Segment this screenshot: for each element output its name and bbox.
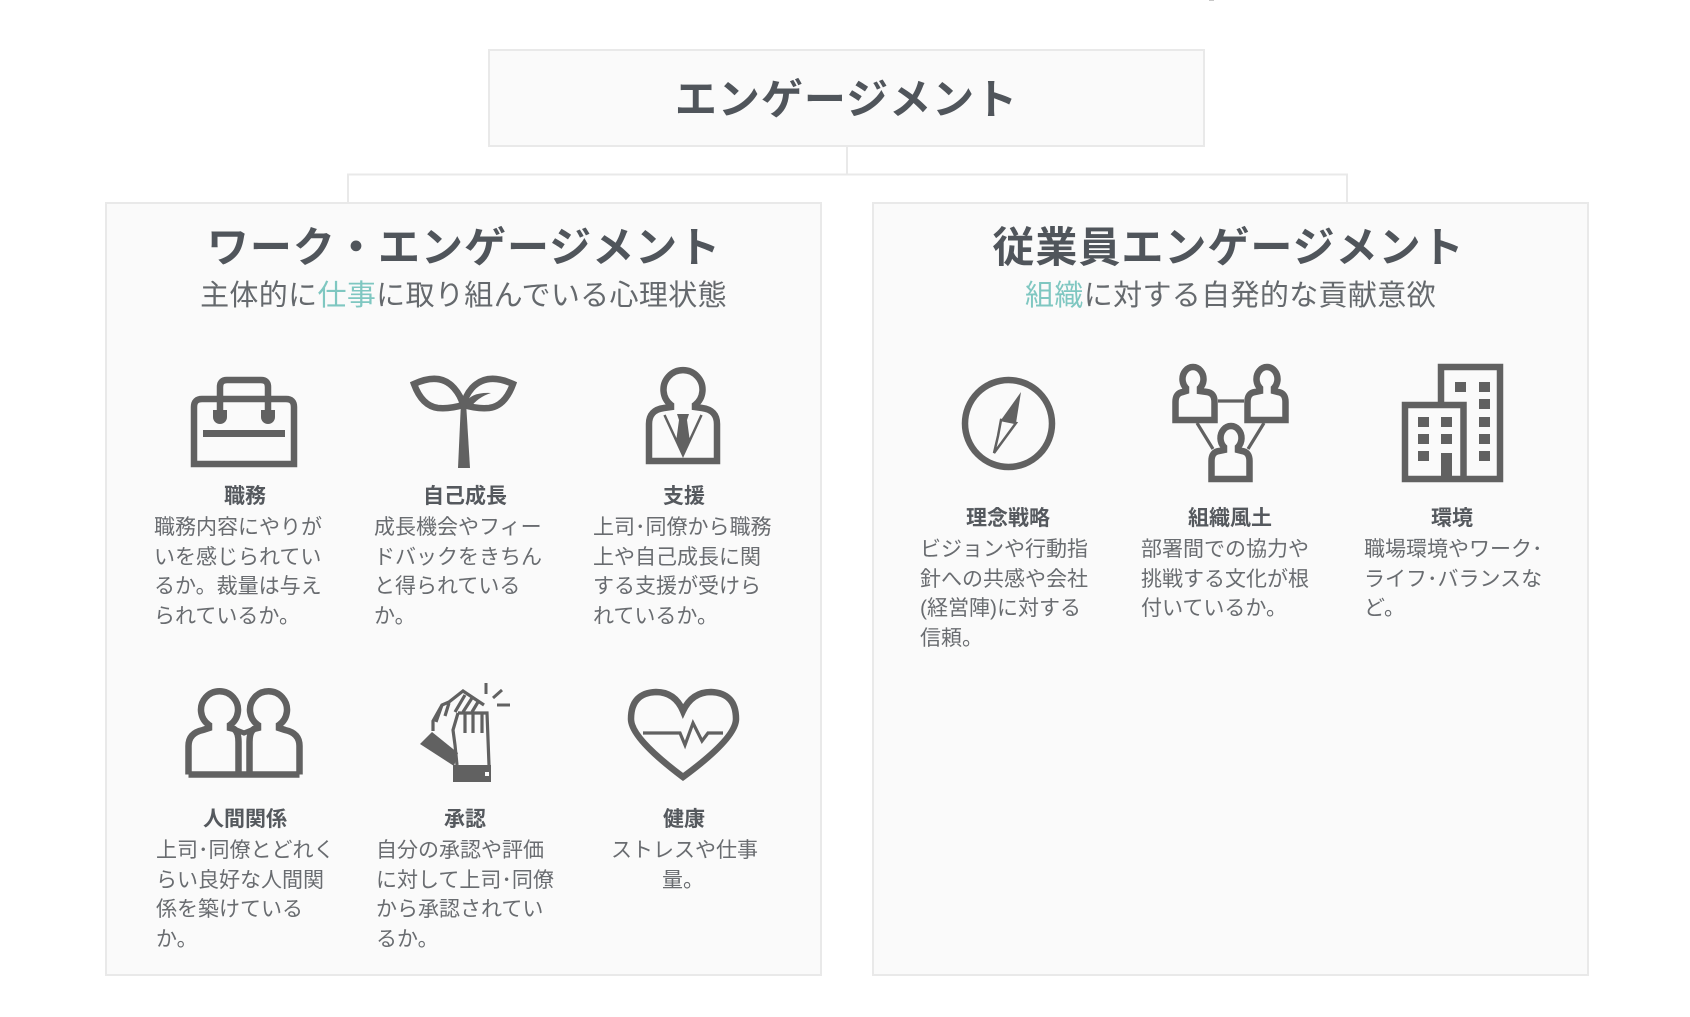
description xyxy=(1141,538,1309,620)
description: と得られている xyxy=(374,575,520,598)
description: ストレスや仕事 xyxy=(611,839,758,862)
description: 信頼。 xyxy=(920,627,983,650)
icon: sprout xyxy=(410,376,517,468)
description: ど。 xyxy=(1364,597,1405,620)
item: 職務 xyxy=(154,376,322,628)
panel: ワーク・エンゲージメント xyxy=(105,202,822,976)
icon: person with tie xyxy=(646,366,720,464)
label: 環境 xyxy=(1431,507,1473,530)
item: 理念戦略 xyxy=(920,376,1088,650)
description: 付いているか。 xyxy=(1141,597,1287,620)
label: 理念戦略 xyxy=(966,507,1050,530)
label: 健康 xyxy=(663,808,705,831)
description: ライフ･バランスな xyxy=(1364,568,1542,591)
description: か。 xyxy=(156,928,198,951)
heading: employee engagement: 従業員エンゲージメント xyxy=(992,224,1465,271)
title box: エンゲージメント xyxy=(488,49,1205,147)
description: られているか。 xyxy=(154,605,300,628)
subheading: employee engagement: 組織に対する自発的な貢献意欲 xyxy=(1025,280,1436,312)
icon: compass xyxy=(962,376,1056,470)
icon: bag xyxy=(190,376,298,468)
description: 針への共感や会社 xyxy=(920,568,1088,591)
description: から承認されてい xyxy=(376,898,543,921)
label: 承認 xyxy=(444,808,486,831)
description: 係を築けている xyxy=(156,898,303,921)
description: るか。裁量は与え xyxy=(154,575,322,598)
description: らい良好な人間関 xyxy=(156,869,324,892)
description xyxy=(374,516,542,628)
icon: connected people xyxy=(1172,364,1289,482)
description xyxy=(156,839,334,951)
label: 人間関係 xyxy=(203,808,287,831)
description: 職場環境やワーク･ xyxy=(1364,538,1542,561)
item: 支援 xyxy=(593,366,772,628)
item: 人間関係 xyxy=(156,688,334,951)
description: 挑戦する文化が根 xyxy=(1141,568,1309,591)
item: 承認 xyxy=(376,683,554,951)
description xyxy=(1364,538,1542,620)
item: 環境 xyxy=(1364,364,1542,620)
description: か。 xyxy=(374,605,416,628)
description: れているか。 xyxy=(593,605,718,628)
description: 上司･同僚から職務 xyxy=(593,516,772,539)
description: 部署間での協力や xyxy=(1141,538,1309,561)
description: 職務内容にやりが xyxy=(154,516,322,539)
item: 組織風土 xyxy=(1141,364,1309,620)
heading: work engagement: ワーク・エンゲージメント xyxy=(207,224,721,271)
panel: 従業員エンゲージメント xyxy=(872,202,1589,976)
icon: buildings xyxy=(1402,364,1504,482)
description: いを感じられてい xyxy=(154,546,321,569)
description: に対して上司･同僚 xyxy=(376,869,554,892)
item: 自己成長 xyxy=(374,376,542,628)
description: 上や自己成長に関 xyxy=(593,546,761,569)
description: 上司･同僚とどれく xyxy=(156,839,334,862)
description: 自分の承認や評価 xyxy=(376,839,544,862)
description: する支援が受けら xyxy=(593,575,761,598)
description xyxy=(611,839,758,892)
description: るか。 xyxy=(376,928,439,951)
icon: two people xyxy=(185,688,303,778)
icon: heart with pulse xyxy=(628,688,740,781)
description xyxy=(593,516,772,628)
connector lines xyxy=(347,147,1348,202)
description xyxy=(376,839,554,951)
description: 成長機会やフィー xyxy=(374,516,542,539)
subheading: work engagement: 主体的に仕事に取り組んでいる心理状態 xyxy=(200,280,727,312)
description: ビジョンや行動指 xyxy=(920,538,1088,561)
description xyxy=(920,538,1088,650)
icon: clapping hands xyxy=(420,683,510,782)
item: 健康 xyxy=(611,688,758,892)
description xyxy=(154,516,322,628)
description: 量。 xyxy=(662,869,704,892)
label: 組織風土 xyxy=(1188,507,1272,530)
label: 支援 xyxy=(663,485,705,508)
title: エンゲージメント xyxy=(675,76,1018,123)
description: (経営陣)に対する xyxy=(920,597,1081,620)
label: 自己成長 xyxy=(423,485,507,508)
label: 職務 xyxy=(224,485,266,508)
description: ドバックをきちん xyxy=(374,546,542,569)
